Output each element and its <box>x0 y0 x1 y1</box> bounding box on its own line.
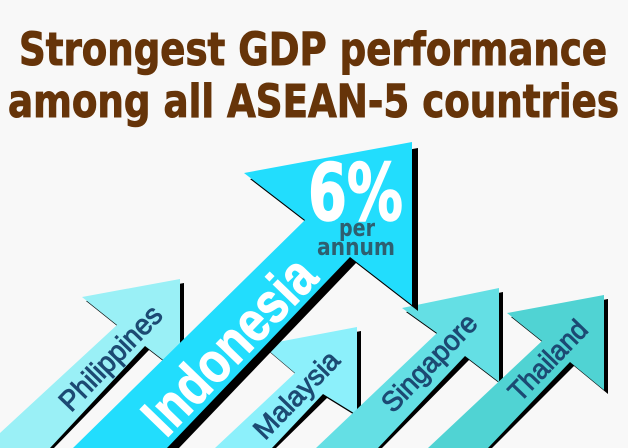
arrow: Thailand <box>428 295 608 448</box>
arrow: Singapore <box>316 288 503 448</box>
caption: per annum <box>317 214 395 261</box>
arrow: Philippines <box>0 279 184 448</box>
title <box>8 23 619 128</box>
label: Philippines: Philippines <box>53 299 169 418</box>
caption: per annum: annum <box>317 233 395 261</box>
arrow: Indonesia <box>73 142 418 448</box>
label: Malaysia: Malaysia <box>247 344 346 445</box>
caption: per annum: per <box>339 214 375 242</box>
value: 6%: 6% <box>308 149 403 239</box>
label: Singapore: Singapore <box>375 307 483 418</box>
label: Thailand: Thailand <box>502 314 594 407</box>
label: Indonesia: Indonesia <box>129 243 330 448</box>
arrow: Malaysia <box>215 327 361 448</box>
